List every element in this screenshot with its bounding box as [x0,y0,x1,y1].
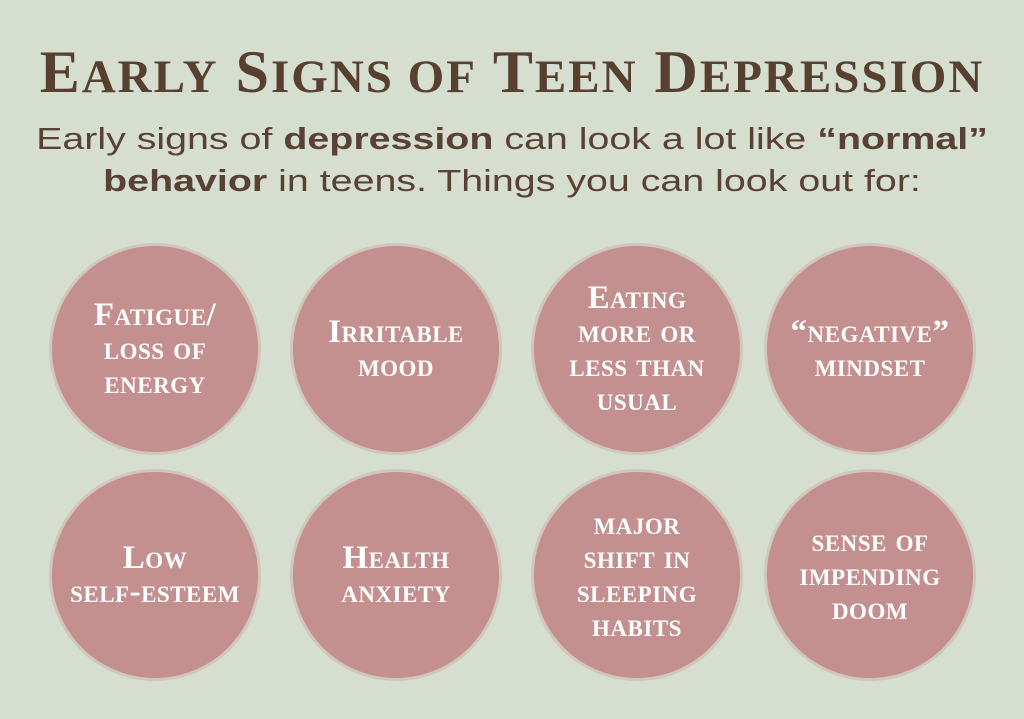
circle: eating: usual [597,382,677,418]
subtitle [36,121,988,198]
circle: eating: less than [569,348,705,384]
circle: irritable [293,246,499,452]
circle: health anxiety: anxiety [341,574,451,610]
circle: sleeping [534,472,740,678]
circle: negative [767,246,973,452]
circle: health anxiety: Health [342,540,450,576]
circle: health anxiety [293,472,499,678]
circle: eating [534,246,740,452]
circle: doom: sense of [811,523,929,559]
circle: doom: doom [832,591,908,627]
circle: eating: Eating [588,280,686,316]
circle: sleeping: shift in [584,540,690,576]
circle: eating: more or [578,314,696,350]
title: EARLY SIGNS OF TEEN DEPRESSION [40,39,984,105]
circle: irritable: Irritable [328,314,464,350]
circle: self-esteem [52,472,258,678]
circle: sleeping: sleeping [577,574,697,610]
circle: self-esteem: self-esteem [70,574,240,610]
circle: irritable: mood [358,348,434,384]
circle: doom [767,472,973,678]
circle: negative: “negative” [790,314,950,350]
subtitle: behavior in teens. Things you can look out for: [103,163,921,198]
circle: doom: impending [799,557,941,593]
subtitle: Early signs of depression can look a lot like “normal” [36,121,988,156]
circle: sleeping: habits [592,608,682,644]
circle: negative: mindset [815,348,925,384]
circle: sleeping: major [594,506,680,542]
circle: fatigue: loss of [104,331,206,367]
circle: self-esteem: Low [123,540,187,576]
circle: fatigue: energy [104,365,206,401]
circle: fatigue: Fatigue/ [94,297,216,333]
circle: fatigue [52,246,258,452]
